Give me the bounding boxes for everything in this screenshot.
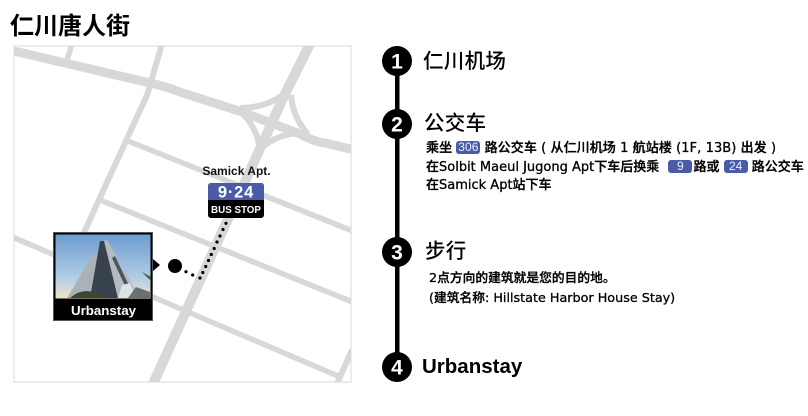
step marker 1: 1 (391, 50, 403, 74)
step marker 2: 2 (391, 114, 403, 136)
step marker 3 (382, 237, 412, 267)
step marker 2 (382, 109, 412, 139)
bus stop sign: BUS STOP (211, 205, 261, 216)
step 2 text: 9 (677, 158, 684, 172)
step marker 4 (382, 352, 412, 382)
step marker 1 (382, 46, 412, 76)
step 3 heading: 步行 (425, 240, 467, 263)
step 2 text: 乘坐 路公交车 ( 从仁川机场 1 航站楼 (1F, 13B) 出发 ) (426, 141, 776, 156)
step 2 text: 在Samick Apt站下车 (426, 178, 552, 193)
step 2 heading: 公交车 (424, 112, 486, 135)
step 2 text (426, 140, 804, 193)
map panel (13, 45, 352, 383)
step 2 text: 306 (458, 140, 478, 154)
building photo card: Urbanstay (71, 303, 137, 318)
bus stop label: Samick Apt. (202, 164, 271, 178)
bus stop sign (208, 183, 264, 218)
step 4 heading: Urbanstay (422, 355, 522, 378)
step marker 4: 4 (391, 356, 403, 380)
building photo card (54, 232, 160, 320)
step 1 heading: 仁川机场 (423, 50, 506, 73)
map roads (10, 44, 355, 386)
step 3 text: 2点方向的建筑就是您的目的地。 (429, 271, 616, 286)
step 3 text: (建筑名称: Hillstate Harbor House Stay) (429, 290, 675, 306)
timeline (382, 46, 412, 382)
title: 仁川唐人街 (10, 6, 130, 41)
step 2 text: 24 (729, 158, 742, 172)
step marker 3: 3 (391, 242, 403, 264)
walking route (168, 222, 228, 280)
bus stop sign: 9·24 (218, 184, 254, 202)
step 2 text: 在Solbit Maeul Jugong Apt下车后换乘 路或 路公交车 (426, 160, 804, 174)
step 3 text (429, 270, 675, 306)
